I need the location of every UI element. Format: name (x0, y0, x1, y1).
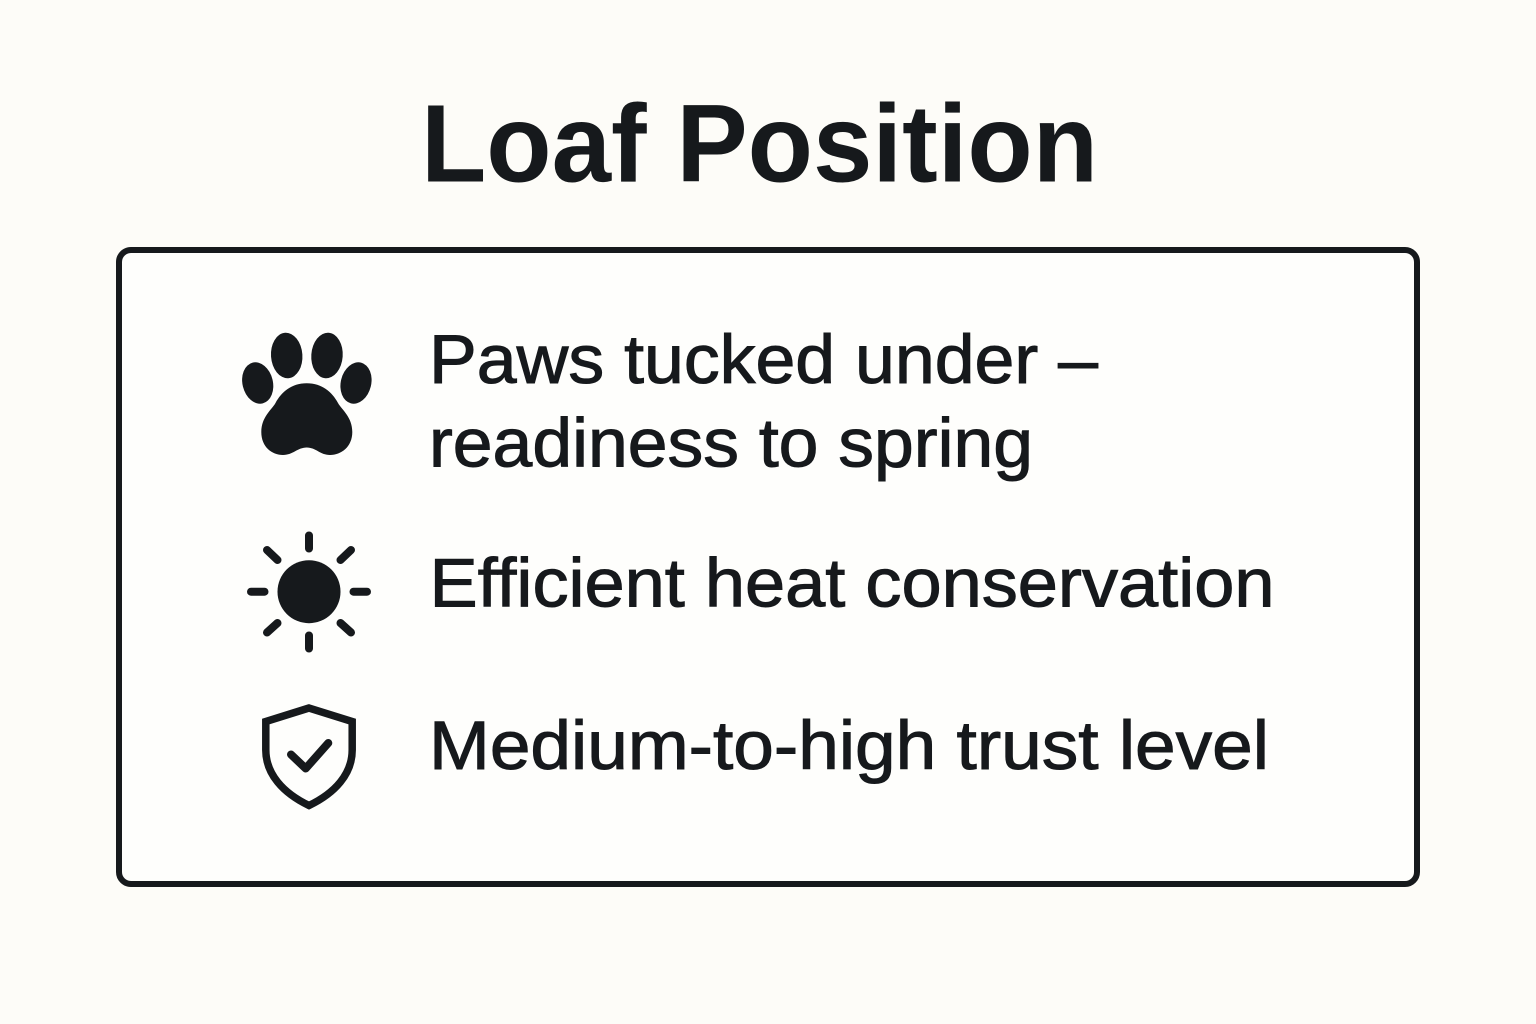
text: medium-to-high trust level: Medium-to-high trust level (429, 707, 1269, 784)
text: efficient heat conservation: Efficient heat conservation (430, 545, 1274, 622)
panel: loaf position traits (119, 250, 1417, 884)
title: Loaf Position (421, 83, 1098, 206)
icon: shield with check (266, 708, 352, 806)
panel frame (119, 250, 1417, 884)
icon: sun (251, 536, 367, 648)
text: paws tucked under: Paws tucked under – (429, 321, 1099, 398)
icon: paw print (238, 332, 376, 455)
text: readiness to spring: readiness to spring (429, 404, 1033, 482)
